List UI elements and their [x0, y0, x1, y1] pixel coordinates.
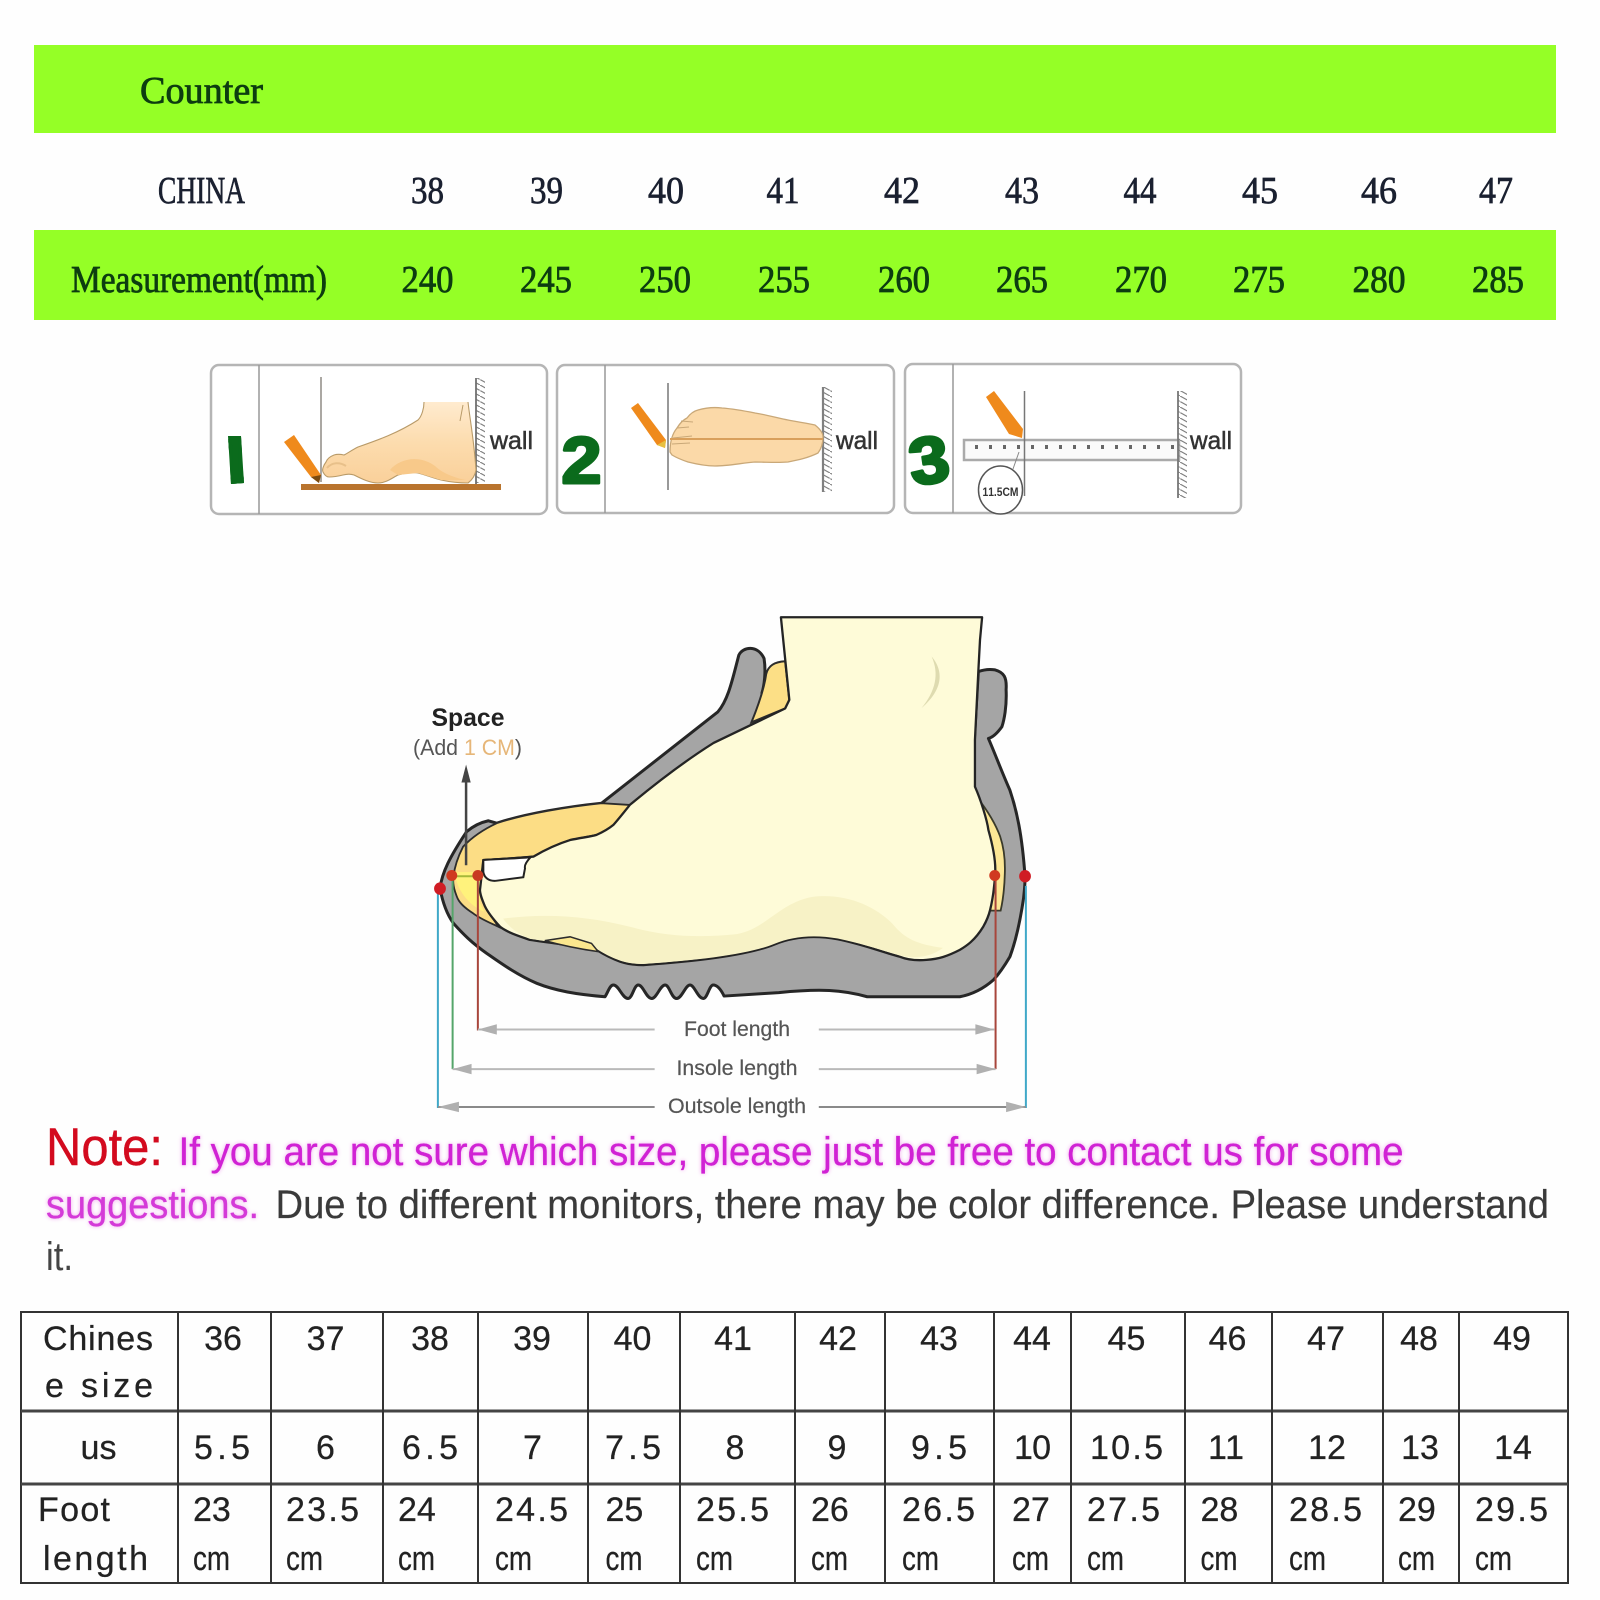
row: foot length: 27.5 [1087, 1491, 1160, 1529]
row: foot length: cm [811, 1540, 848, 1578]
row: foot length: 29 [1398, 1491, 1436, 1529]
panel: measurement row: Measurement(mm) [71, 259, 327, 301]
arrow: space [461, 765, 471, 865]
panel: measurement row: 260 [878, 259, 930, 301]
note text block [46, 1118, 1549, 1279]
row: Chinese size [43, 1320, 1531, 1405]
panel: China size row: CHINA [158, 170, 245, 212]
row: foot length: 24.5 [495, 1491, 568, 1529]
row: foot length: 28.5 [1289, 1491, 1362, 1529]
row: US size: 6 [316, 1429, 335, 1467]
icon: pencil [284, 435, 321, 483]
row: Chinese size: 40 [614, 1320, 651, 1358]
note text block: Due to different monitors, there may be color difference. Please understand [276, 1183, 1549, 1227]
step number 1: 1 [216, 424, 253, 498]
panel: China size row: 42 [884, 170, 920, 212]
row: US size: 9.5 [911, 1429, 967, 1467]
row: Chinese size: 47 [1307, 1320, 1345, 1358]
row: foot length: 23 [193, 1491, 231, 1529]
row: US size: 14 [1494, 1429, 1532, 1467]
icon: pencil [631, 403, 666, 448]
diagram: foot in shoe cross-section [413, 617, 1031, 1118]
panel: China size row: 43 [1005, 170, 1039, 212]
panel: measurement row: 265 [996, 259, 1048, 301]
measure guide lines [438, 876, 1026, 1108]
row: Chinese size: 42 [819, 1320, 857, 1358]
note text block: If you are not sure which size, please just be free to contact us for some [178, 1130, 1404, 1174]
measure points [434, 870, 1031, 895]
row: Chinese size: 46 [1209, 1320, 1246, 1358]
icon: foot side view [323, 402, 476, 483]
row: Chinese size: Chines [43, 1320, 153, 1358]
row: US size: 10 [1014, 1429, 1051, 1467]
panel: measurement row: 250 [639, 259, 691, 301]
row: Chinese size: 45 [1108, 1320, 1145, 1358]
yellow toe lining [453, 803, 630, 927]
panel: measurement row: 245 [520, 259, 572, 301]
panel: step 1 measure foot side view: wall [489, 427, 533, 455]
row: foot length: 25.5 [696, 1491, 769, 1529]
dimension arrows [438, 1029, 1026, 1107]
row: US size: 10.5 [1090, 1429, 1163, 1467]
row: foot length: 29.5 [1475, 1491, 1548, 1529]
row: foot length: cm [193, 1540, 230, 1578]
row: Chinese size: e size [45, 1367, 153, 1405]
row: US size: 12 [1308, 1429, 1346, 1467]
toenail [483, 857, 530, 881]
panel: China size row: 44 [1124, 170, 1156, 212]
row: Chinese size: 37 [307, 1320, 344, 1358]
row: US size: 11 [1208, 1429, 1244, 1467]
size conversion table [21, 1312, 1568, 1583]
panel: China size row: 40 [648, 170, 684, 212]
row: foot length: 26 [811, 1491, 849, 1529]
row: US size: 7.5 [605, 1429, 661, 1467]
panel: measurement row [34, 230, 1556, 320]
row: foot length: cm [1012, 1540, 1049, 1578]
shoe outer shell [440, 648, 1025, 998]
panel: step 2 measure foot top view: 2 [562, 423, 602, 497]
row: foot length: length [43, 1540, 148, 1578]
row: US size: 6.5 [402, 1429, 458, 1467]
note text block: Note: [46, 1118, 163, 1177]
row: US size [81, 1429, 1532, 1467]
row: US size: 13 [1401, 1429, 1439, 1467]
toe gap highlight [455, 872, 484, 912]
row: foot length: 24 [398, 1491, 436, 1529]
row: US size: 8 [726, 1429, 744, 1467]
row: foot length: cm [696, 1540, 733, 1578]
panel: measurement row: 240 [402, 259, 454, 301]
panel: measurement row: 270 [1115, 259, 1167, 301]
label: add 1 cm: (Add 1 CM) [413, 735, 522, 760]
row: foot length: cm [1200, 1540, 1238, 1578]
label: outsole length: Outsole length [668, 1095, 806, 1118]
row: foot length: 28 [1200, 1491, 1238, 1529]
yellow heel lining [977, 797, 1005, 911]
panel: step 3 measure with ruler: wall [1189, 427, 1232, 455]
step number 1 [228, 436, 244, 484]
row: US size: 9 [828, 1429, 846, 1467]
row: Chinese size: 49 [1493, 1320, 1531, 1358]
row: foot length: cm [1289, 1540, 1326, 1578]
row: foot length: cm [1475, 1540, 1512, 1578]
label: insole length: Insole length [676, 1057, 798, 1080]
row: foot length: 25 [606, 1491, 643, 1529]
panel: China size row: 39 [530, 170, 563, 212]
panel: step 1 measure foot side view [211, 365, 547, 514]
row: foot length: cm [902, 1540, 939, 1578]
panel: step 3 measure with ruler: 3 [904, 421, 954, 499]
row: foot length: 26.5 [902, 1491, 975, 1529]
panel: measurement row: 275 [1233, 259, 1285, 301]
row: US size: 7 [523, 1429, 542, 1467]
row: foot length: cm [286, 1540, 323, 1578]
row: foot length: cm [606, 1540, 642, 1578]
row: Chinese size: 48 [1400, 1320, 1438, 1358]
row: foot length: 27 [1012, 1491, 1050, 1529]
row: foot length: cm [1087, 1540, 1124, 1578]
yellow collar lining [751, 661, 789, 722]
label: space: Space [432, 704, 505, 732]
table grid [21, 1312, 1568, 1583]
row: foot length: Foot [38, 1491, 111, 1529]
icon: pencil [986, 391, 1023, 438]
panel: step 2 measure foot top view: wall [835, 427, 878, 455]
icon: foot top view [670, 408, 823, 466]
heading: Counter: Counter [140, 70, 263, 112]
panel: counter header bar [34, 45, 1556, 133]
row: Chinese size: 36 [204, 1320, 242, 1358]
panel: China size row: 46 [1361, 170, 1397, 212]
panel: measurement row: 285 [1472, 259, 1524, 301]
row: Chinese size: 39 [513, 1320, 551, 1358]
panel: China size row: 47 [1479, 170, 1513, 212]
panel: China size row [158, 170, 1513, 212]
row: US size: us [81, 1429, 116, 1467]
row: Chinese size: 41 [714, 1320, 752, 1358]
row: foot length: cm [398, 1540, 435, 1578]
label: foot length: Foot length [684, 1018, 790, 1041]
row: Chinese size: 38 [411, 1320, 449, 1358]
row: Chinese size: 43 [920, 1320, 958, 1358]
row: US size: 5.5 [194, 1429, 250, 1467]
callout: measured length: 11.5CM [982, 485, 1018, 499]
panel: China size row: 38 [411, 170, 444, 212]
row: foot length: cm [495, 1540, 532, 1578]
note text block: suggestions. [46, 1183, 259, 1227]
panel: China size row: 45 [1242, 170, 1278, 212]
callout: measured length [978, 466, 1022, 514]
note text block: it. [46, 1235, 73, 1279]
foot sole shading [503, 896, 943, 964]
panel: measurement row: 280 [1352, 259, 1406, 301]
yellow sole insert [545, 937, 598, 952]
row: foot length [38, 1491, 1548, 1578]
row: foot length: cm [1398, 1540, 1435, 1578]
icon: ruler [964, 440, 1179, 460]
panel: step 3 measure with ruler [904, 364, 1241, 514]
foot [480, 617, 995, 965]
row: foot length: 23.5 [286, 1491, 359, 1529]
panel: China size row: 41 [766, 170, 800, 212]
row: Chinese size: 44 [1013, 1320, 1051, 1358]
ankle mark [921, 656, 940, 708]
panel: step 2 measure foot top view [557, 365, 894, 513]
panel: measurement row: 255 [758, 259, 810, 301]
